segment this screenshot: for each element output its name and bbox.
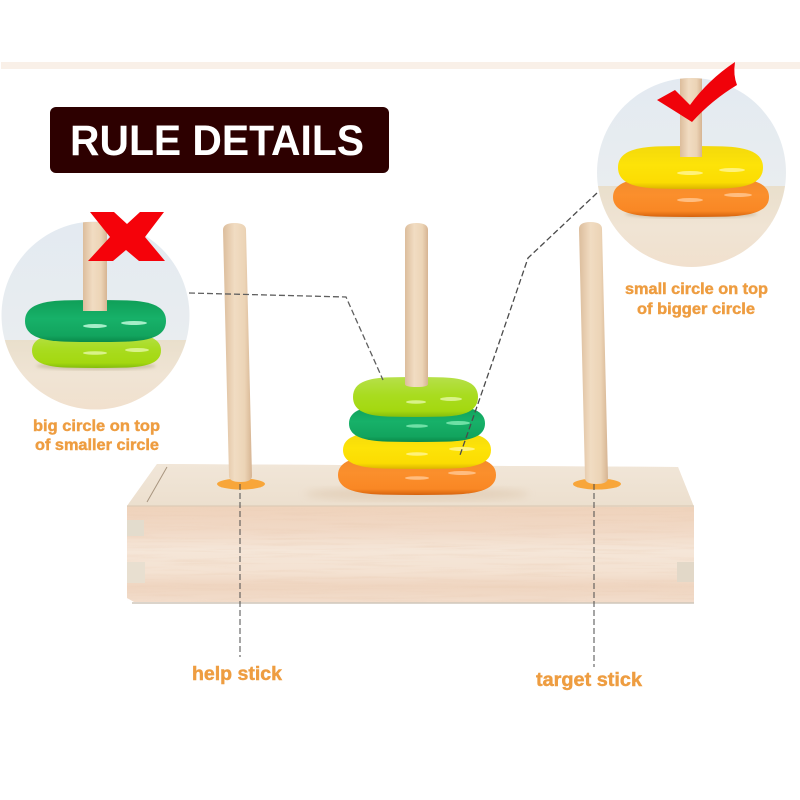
yellow disc xyxy=(618,146,763,189)
yellow ring xyxy=(343,431,491,469)
title banner: RULE DETAILS xyxy=(70,117,364,165)
small peg xyxy=(680,76,702,157)
caption: correct example: of bigger circle xyxy=(637,301,755,318)
caption: correct example: small circle on top xyxy=(625,281,768,298)
washer: target stick xyxy=(573,478,621,490)
label: target stick: target stick xyxy=(536,670,642,691)
caption: wrong example: of smaller circle xyxy=(35,437,159,454)
label: help stick: help stick xyxy=(192,664,282,685)
dashed connector: right circle to ring xyxy=(460,193,597,455)
right circle: correct example xyxy=(596,76,788,270)
wooden base xyxy=(127,464,694,603)
light green ring xyxy=(353,377,478,417)
red cross xyxy=(88,212,165,261)
top strip xyxy=(1,62,800,69)
caption: wrong example: big circle on top xyxy=(33,418,160,435)
ring stack xyxy=(338,340,496,495)
center peg upper part xyxy=(405,340,428,387)
dashed connector: help stick xyxy=(239,484,241,657)
dashed connector: target stick xyxy=(593,484,595,667)
left circle: wrong example xyxy=(0,220,192,412)
title banner xyxy=(50,107,389,173)
caption: correct example xyxy=(625,281,768,318)
green ring xyxy=(349,405,485,442)
small peg xyxy=(83,222,107,311)
center peg xyxy=(405,223,428,389)
green disc xyxy=(25,300,166,342)
light green disc xyxy=(32,338,161,368)
caption: wrong example xyxy=(33,418,160,454)
washer: help stick xyxy=(217,478,265,490)
dashed connector: left circle to ring xyxy=(189,293,383,380)
red check mark xyxy=(657,62,737,122)
orange disc xyxy=(613,182,769,217)
help stick peg xyxy=(223,223,252,482)
target stick peg xyxy=(579,222,608,484)
orange ring xyxy=(338,455,496,495)
